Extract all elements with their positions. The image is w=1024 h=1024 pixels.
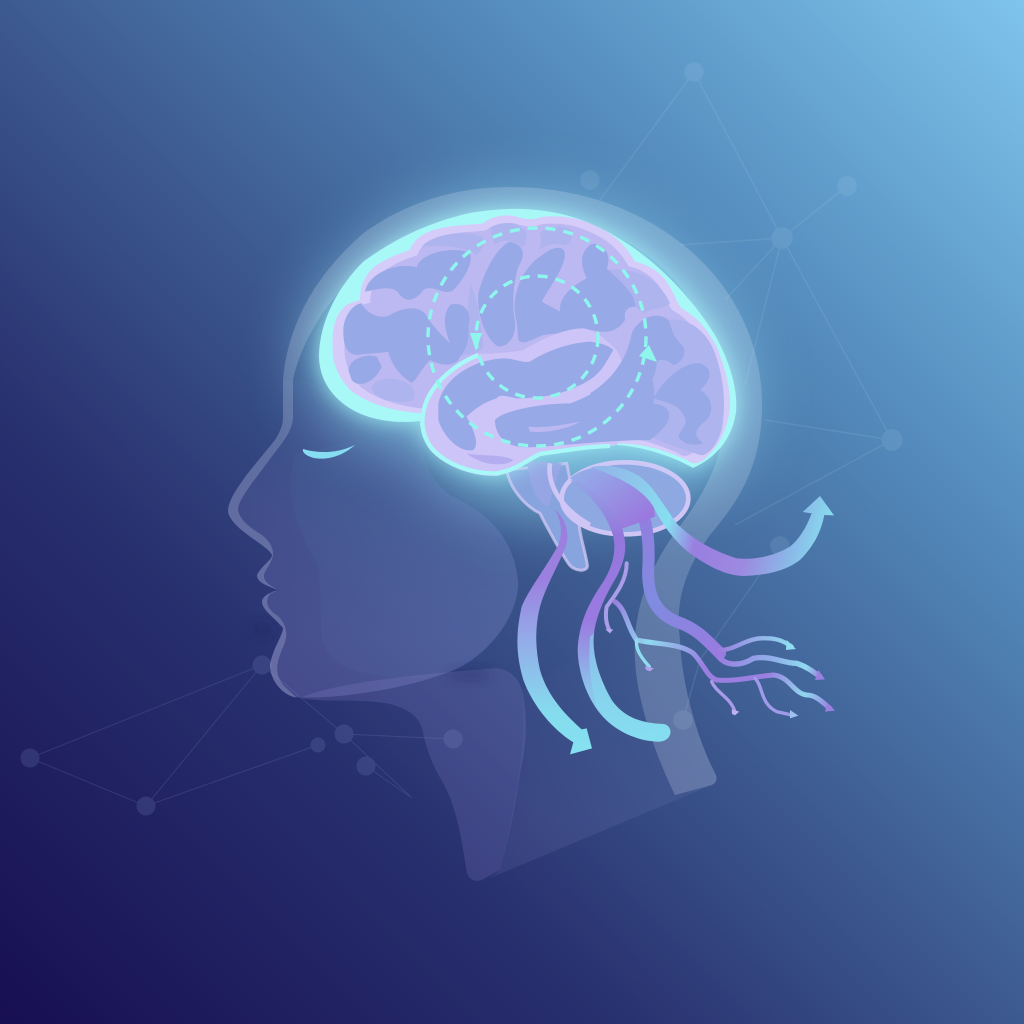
arrowhead: up	[639, 345, 657, 362]
arrowhead: down	[470, 333, 482, 351]
shoulder plane	[490, 620, 716, 878]
arrow: left descending stream	[517, 509, 592, 754]
arrow: middle descending stream	[570, 480, 670, 742]
cheek plane	[291, 430, 518, 678]
cyan inner edge on middle stream	[589, 633, 670, 742]
brain glow halo	[309, 199, 746, 510]
brain cyan rim	[319, 209, 736, 476]
neck plane	[300, 668, 526, 881]
shadow smudges	[252, 623, 272, 637]
flow arrows	[517, 466, 835, 754]
inner dashed circle	[476, 276, 598, 398]
face plane	[228, 380, 518, 698]
arrow: right sweeping stream	[590, 466, 834, 576]
cycle arrows: dashed circles	[428, 228, 657, 446]
stream junction blob	[570, 467, 655, 530]
arrow: branching stream	[606, 487, 830, 715]
brain folds: blue gyri	[343, 242, 635, 384]
brain outer glow	[319, 209, 736, 476]
lighter lobes	[372, 223, 724, 455]
cerebellum and brain stem	[507, 460, 688, 570]
cerebellum	[562, 462, 688, 534]
eye lash	[303, 445, 355, 459]
brain lobes pale	[332, 215, 730, 463]
brain stem	[507, 463, 587, 570]
network: lower left constellation	[21, 656, 462, 815]
brain interior midtone	[344, 223, 718, 456]
temporal lobe	[420, 328, 669, 476]
head silhouette	[228, 187, 762, 881]
outer dashed circle	[428, 228, 646, 446]
brain main body	[319, 209, 736, 476]
network: upper right constellation	[581, 63, 902, 729]
small arrowheads	[786, 640, 796, 650]
right lobes	[590, 316, 711, 445]
head outline band	[228, 187, 762, 795]
